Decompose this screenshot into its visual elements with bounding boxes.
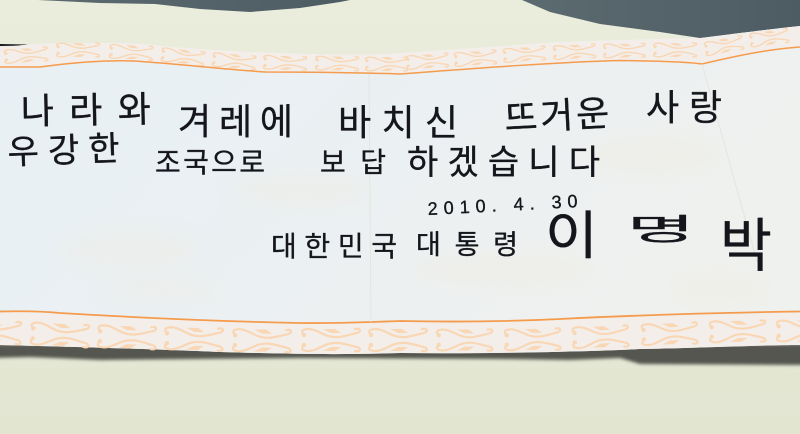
top orange rule: [0, 47, 800, 74]
word: 우강한: 우강한: [7, 130, 120, 172]
page fold: [369, 64, 760, 322]
bottom decorative band: [0, 311, 800, 354]
line 1: [20, 87, 722, 143]
word: 겨레에: 겨레에: [178, 101, 293, 142]
shadow beneath the paper: [0, 344, 800, 365]
bottom band ornament: [0, 320, 800, 352]
word: 보답: 보답: [320, 147, 386, 178]
signature 박: 박: [720, 214, 772, 279]
word: 바치신: 바치신: [338, 102, 458, 143]
word: 사랑: 사랑: [646, 87, 722, 128]
handwritten message: [7, 87, 772, 279]
top band ornament: [4, 28, 789, 71]
word: 뜨거운: 뜨거운: [503, 93, 610, 139]
date: 2010. 4. 30: [427, 191, 578, 219]
word: 하겠습니다: 하겠습니다: [407, 144, 600, 182]
top shadow: right: [522, 0, 800, 38]
signature: 이명박: [545, 208, 772, 279]
guestbook paper sheet: [0, 26, 800, 354]
line 2: [7, 130, 600, 182]
word: 조국으로: 조국으로: [155, 147, 265, 178]
black line at top left edge: [0, 44, 50, 46]
paper body: [0, 26, 800, 354]
watermark blotches: [60, 137, 770, 304]
signature 명: 명: [627, 214, 695, 247]
word: 나라와: 나라와: [20, 89, 151, 132]
top shadow: left: [38, 0, 350, 12]
top decorative band: [0, 26, 800, 74]
title: 대한민국 대통령: [271, 230, 518, 262]
bottom orange rule: [0, 311, 800, 323]
word: 대통령: 대통령: [416, 230, 518, 260]
signature 이: 이: [545, 208, 598, 266]
word: 대한민국: 대한민국: [271, 231, 397, 262]
